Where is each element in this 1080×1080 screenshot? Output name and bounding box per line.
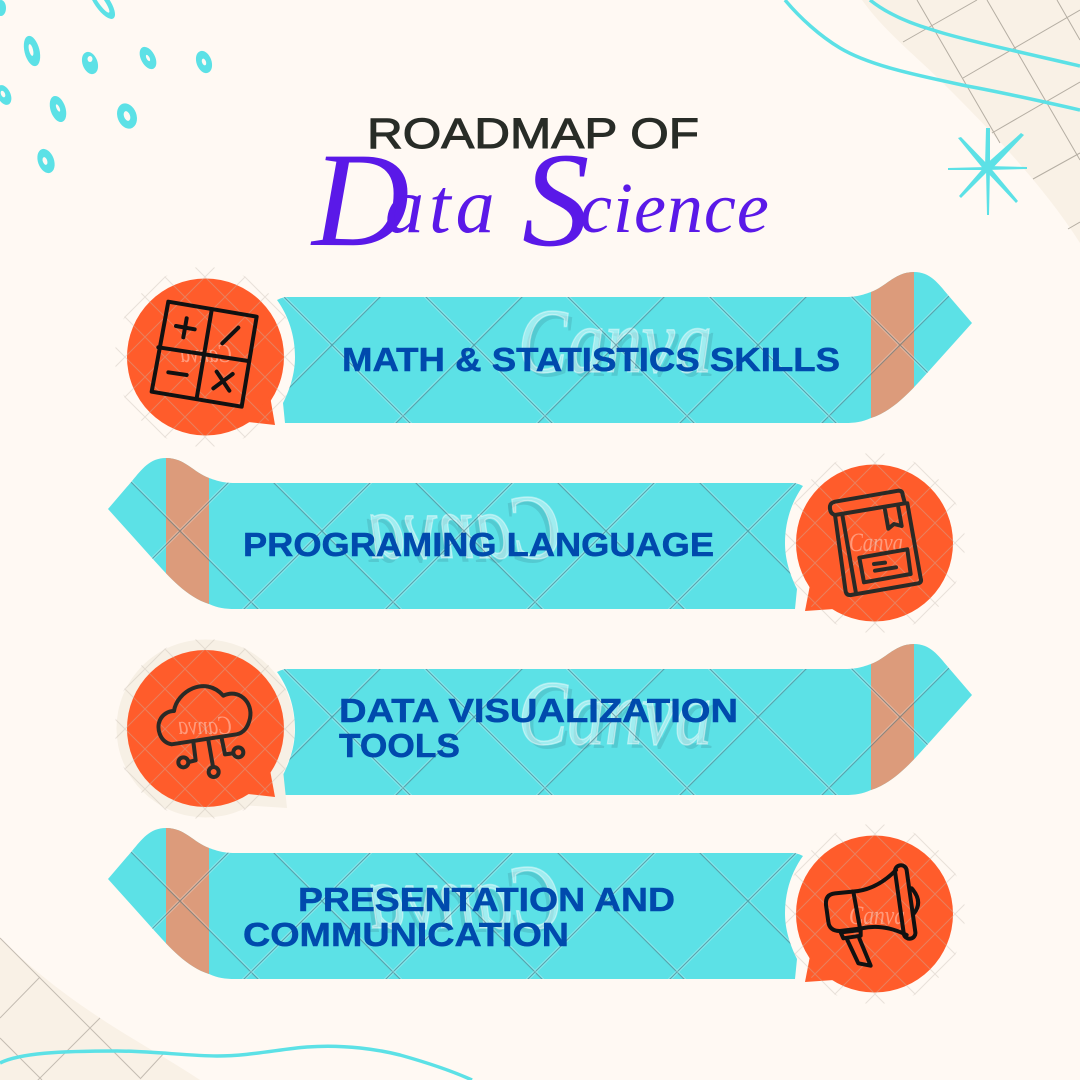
title: data science: D	[310, 126, 410, 275]
icon: book bubble: Canva	[849, 528, 903, 557]
title: data science: ata	[385, 162, 524, 249]
label: presentation and communication: COMMUNICATION	[243, 916, 569, 953]
icon: cloud bubble	[115, 639, 295, 819]
title: roadmap of: ROADMAP OF	[367, 110, 699, 158]
icon: cloud network	[158, 686, 250, 777]
panel: banner 1: Canva	[522, 294, 716, 396]
icon: book	[830, 491, 921, 595]
icon: megaphone bubble: Canva	[849, 901, 905, 930]
icon: calculator bubble: Canva	[180, 339, 232, 368]
icon: cloud bubble: Canva	[178, 711, 232, 740]
label: presentation and communication: PRESENTATION AND	[298, 881, 675, 918]
panel: banner 1	[277, 265, 972, 430]
label: math and statistics skills: MATH & STATISTICS SKILLS	[342, 341, 840, 378]
icon: book bubble	[785, 453, 965, 633]
label: data visualization tools: DATA VISUALIZATION	[339, 692, 738, 729]
panel: banner 1: Canva	[518, 290, 712, 392]
panel: banner 3: Canva	[522, 666, 716, 768]
label: data visualization tools: TOOLS	[339, 727, 460, 764]
icon: megaphone	[826, 865, 918, 966]
label: presentation and communication	[243, 881, 675, 953]
icon: calculator bubble	[115, 267, 295, 447]
icon: megaphone bubble	[785, 824, 965, 1004]
panel: banner 4: Canva	[368, 846, 562, 948]
panel: banner 2: Canva	[368, 476, 562, 578]
title: data science: S	[522, 126, 590, 275]
icon: star burst	[948, 128, 1027, 215]
panel: banner 2	[108, 451, 803, 616]
decorative dots: ring pattern	[0, 0, 215, 175]
panel: banner 4: Canva	[364, 850, 558, 952]
label: programing language: PROGRAMING LANGUAGE	[243, 526, 714, 563]
decorative panel: top right grid	[862, 0, 1080, 243]
panel: banner 2: Canva	[364, 480, 558, 582]
panel: banner 4	[108, 821, 803, 986]
decorative curve: bottom	[0, 1046, 472, 1080]
panel: banner 3: Canva	[518, 662, 712, 764]
icon: calculator	[152, 302, 257, 407]
decorative panel: bottom left grid	[0, 938, 200, 1080]
label: data visualization tools	[339, 692, 738, 764]
title: data science: cience	[580, 168, 770, 248]
decorative curves: top right	[785, 0, 1080, 110]
panel: banner 3	[277, 637, 972, 802]
